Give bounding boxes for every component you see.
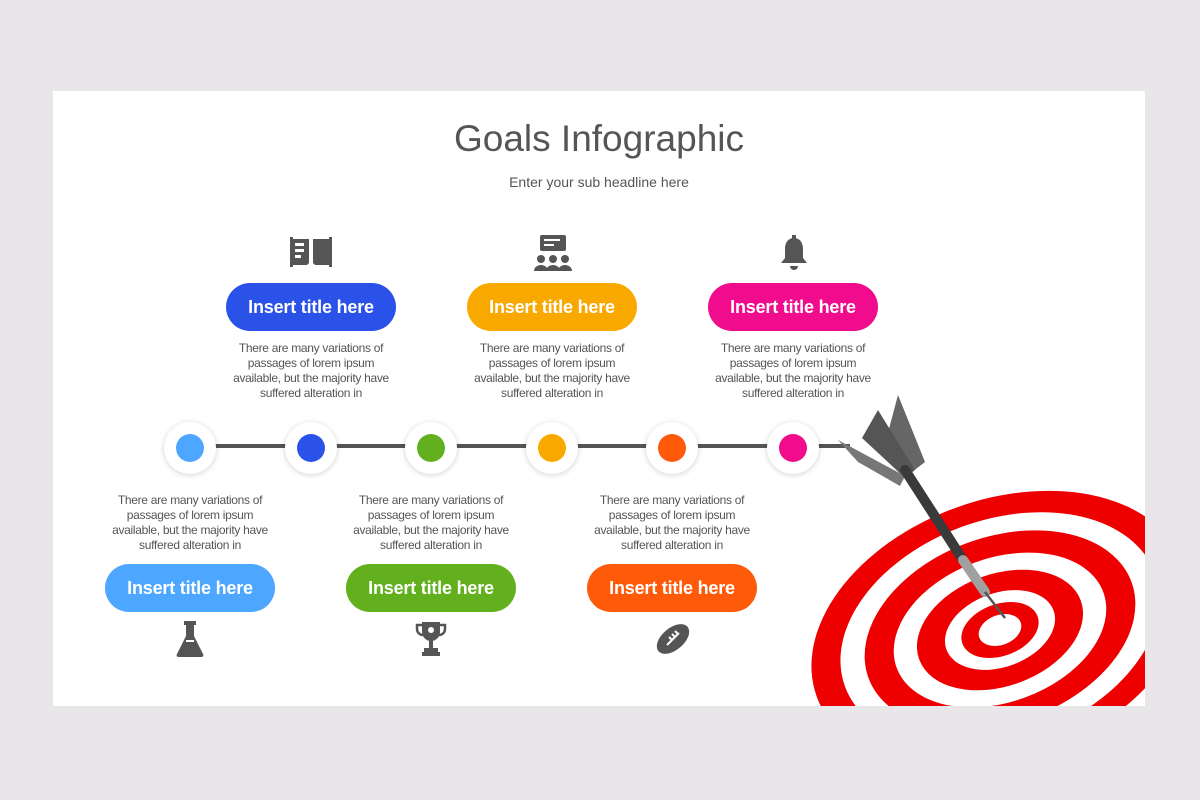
text: suffered alteration in xyxy=(260,386,362,400)
text: passages of lorem ipsum xyxy=(609,508,735,522)
step: top 3 xyxy=(708,235,878,400)
text: passages of lorem ipsum xyxy=(248,356,374,370)
text: passages of lorem ipsum xyxy=(730,356,856,370)
icon: football xyxy=(656,624,690,654)
text: available, but the majority have xyxy=(474,371,630,385)
icon: trophy xyxy=(416,622,446,656)
text: available, but the majority have xyxy=(353,523,509,537)
subtitle: Enter your sub headline here xyxy=(509,174,689,190)
step: bottom 3 xyxy=(587,493,757,654)
pill: Insert title here xyxy=(248,297,374,317)
text: There are many variations of xyxy=(359,493,503,507)
text xyxy=(474,341,630,400)
text: suffered alteration in xyxy=(621,538,723,552)
text: There are many variations of xyxy=(239,341,383,355)
pill xyxy=(105,564,275,612)
pill: Insert title here xyxy=(489,297,615,317)
text: passages of lorem ipsum xyxy=(127,508,253,522)
text: available, but the majority have xyxy=(233,371,389,385)
target with dart xyxy=(216,395,1145,706)
text xyxy=(715,341,871,400)
pill: Insert title here xyxy=(609,578,735,598)
step: top 2 xyxy=(467,235,637,400)
icon: presentation xyxy=(534,235,572,271)
pill xyxy=(346,564,516,612)
dart xyxy=(838,395,1005,618)
text: There are many variations of xyxy=(480,341,624,355)
pill: Insert title here xyxy=(368,578,494,598)
pill xyxy=(587,564,757,612)
text xyxy=(594,493,750,552)
text: There are many variations of xyxy=(721,341,865,355)
icon: book xyxy=(290,237,332,267)
text xyxy=(112,493,268,552)
timeline dots xyxy=(162,420,822,478)
text: passages of lorem ipsum xyxy=(368,508,494,522)
text: There are many variations of xyxy=(118,493,262,507)
text: suffered alteration in xyxy=(380,538,482,552)
text: passages of lorem ipsum xyxy=(489,356,615,370)
text xyxy=(233,341,389,400)
text: There are many variations of xyxy=(600,493,744,507)
text: suffered alteration in xyxy=(742,386,844,400)
timeline line xyxy=(190,444,850,448)
text: available, but the majority have xyxy=(715,371,871,385)
icon: bell xyxy=(781,235,807,270)
text: available, but the majority have xyxy=(112,523,268,537)
pill: Insert title here xyxy=(730,297,856,317)
title: Goals Infographic xyxy=(454,118,744,159)
text: suffered alteration in xyxy=(501,386,603,400)
step: bottom 2 xyxy=(346,493,516,656)
pill: Insert title here xyxy=(127,578,253,598)
step: top 1 xyxy=(226,237,396,400)
step: bottom 1 xyxy=(105,493,275,657)
pill xyxy=(467,283,637,331)
text xyxy=(353,493,509,552)
icon: flask xyxy=(176,621,204,657)
slide panel xyxy=(53,91,1145,706)
pill xyxy=(708,283,878,331)
text: available, but the majority have xyxy=(594,523,750,537)
pill xyxy=(226,283,396,331)
text: suffered alteration in xyxy=(139,538,241,552)
